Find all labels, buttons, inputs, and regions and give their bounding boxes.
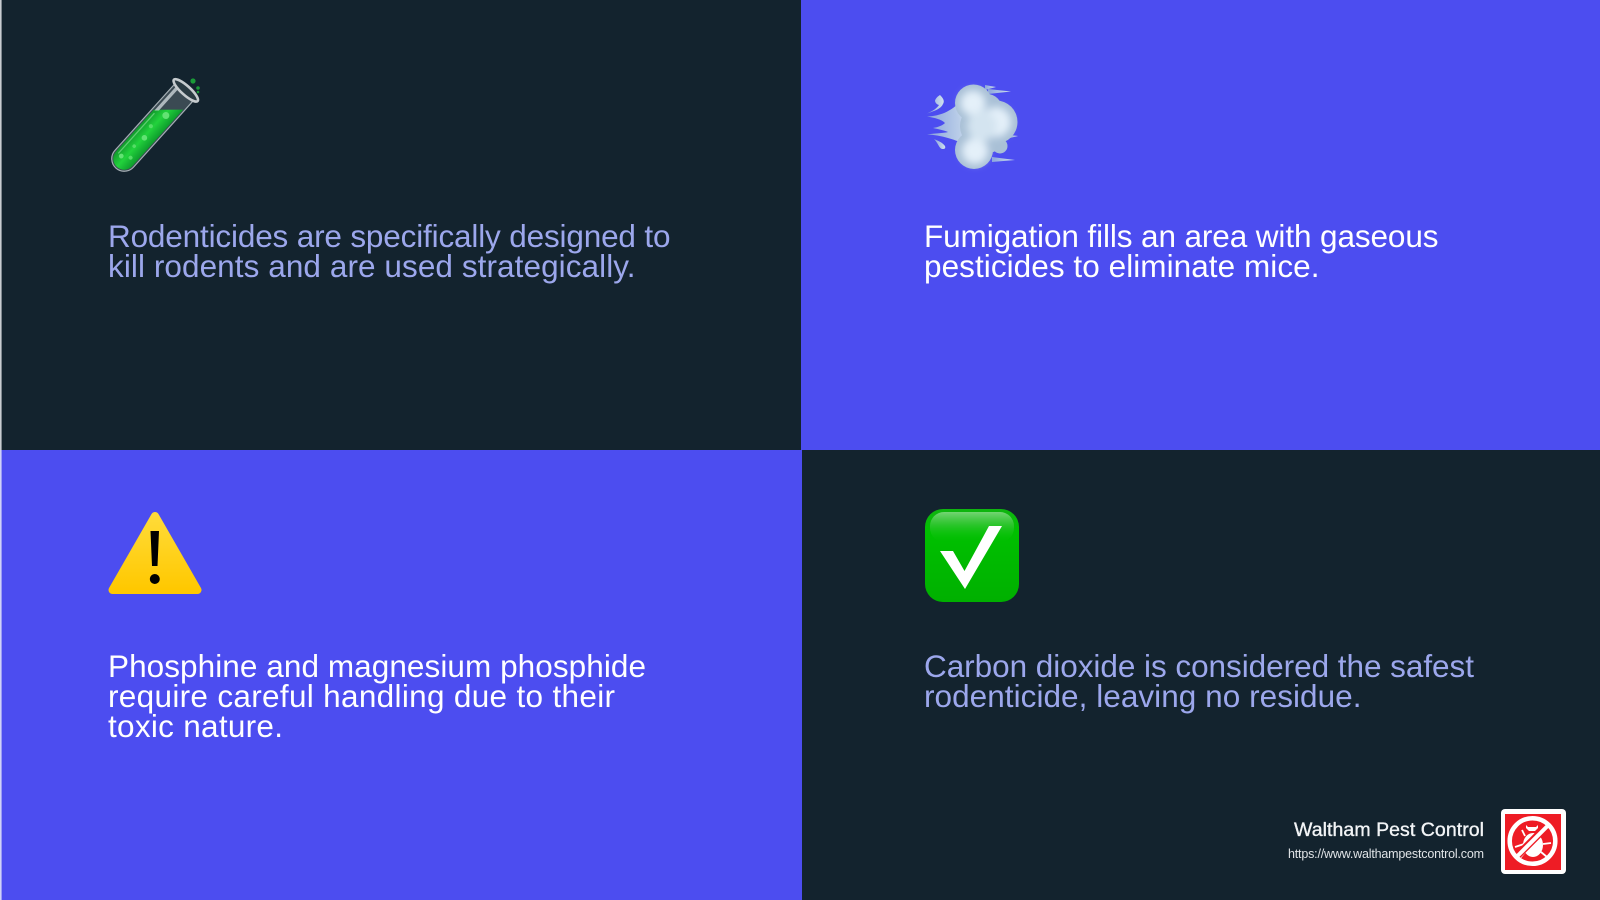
icon: green check mark bbox=[925, 509, 1019, 602]
panel: fumigation bbox=[801, 0, 1600, 450]
text: rodenticides: kill rodents and are used strategically. bbox=[108, 248, 636, 284]
icon: test tube bbox=[104, 76, 201, 179]
brand url: https://www.walthampestcontrol.com bbox=[1288, 847, 1484, 861]
cloud highlights bbox=[960, 90, 1011, 164]
icon: no pests logo bbox=[1501, 809, 1566, 874]
icon: warning triangle bbox=[112, 516, 198, 590]
text: carbon dioxide: Carbon dioxide is considered the safest bbox=[924, 648, 1474, 684]
brand name: Waltham Pest Control bbox=[1294, 819, 1484, 841]
text: phosphine: require careful handling due to their bbox=[108, 678, 615, 714]
footer: brand bbox=[1288, 809, 1566, 874]
text: carbon dioxide: rodenticide, leaving no residue. bbox=[924, 678, 1362, 714]
panel: carbon dioxide bbox=[802, 450, 1600, 900]
text: phosphine bbox=[108, 648, 646, 744]
text: carbon dioxide bbox=[924, 648, 1474, 714]
icon: rising bubbles bbox=[190, 78, 200, 93]
text: phosphine: toxic nature. bbox=[108, 708, 283, 744]
text: fumigation bbox=[924, 218, 1438, 284]
text: fumigation: pesticides to eliminate mice. bbox=[924, 248, 1320, 284]
panel: rodenticides bbox=[0, 0, 801, 450]
panel: phosphine warning bbox=[0, 450, 802, 900]
text: rodenticides bbox=[108, 218, 670, 284]
text: rodenticides: Rodenticides are specifically designed to bbox=[108, 218, 670, 254]
icon: gas cloud bbox=[927, 84, 1018, 169]
cloud body bbox=[955, 84, 1018, 169]
text: fumigation: Fumigation fills an area with gaseous bbox=[924, 218, 1438, 254]
text: phosphine: Phosphine and magnesium phosphide bbox=[108, 648, 646, 684]
